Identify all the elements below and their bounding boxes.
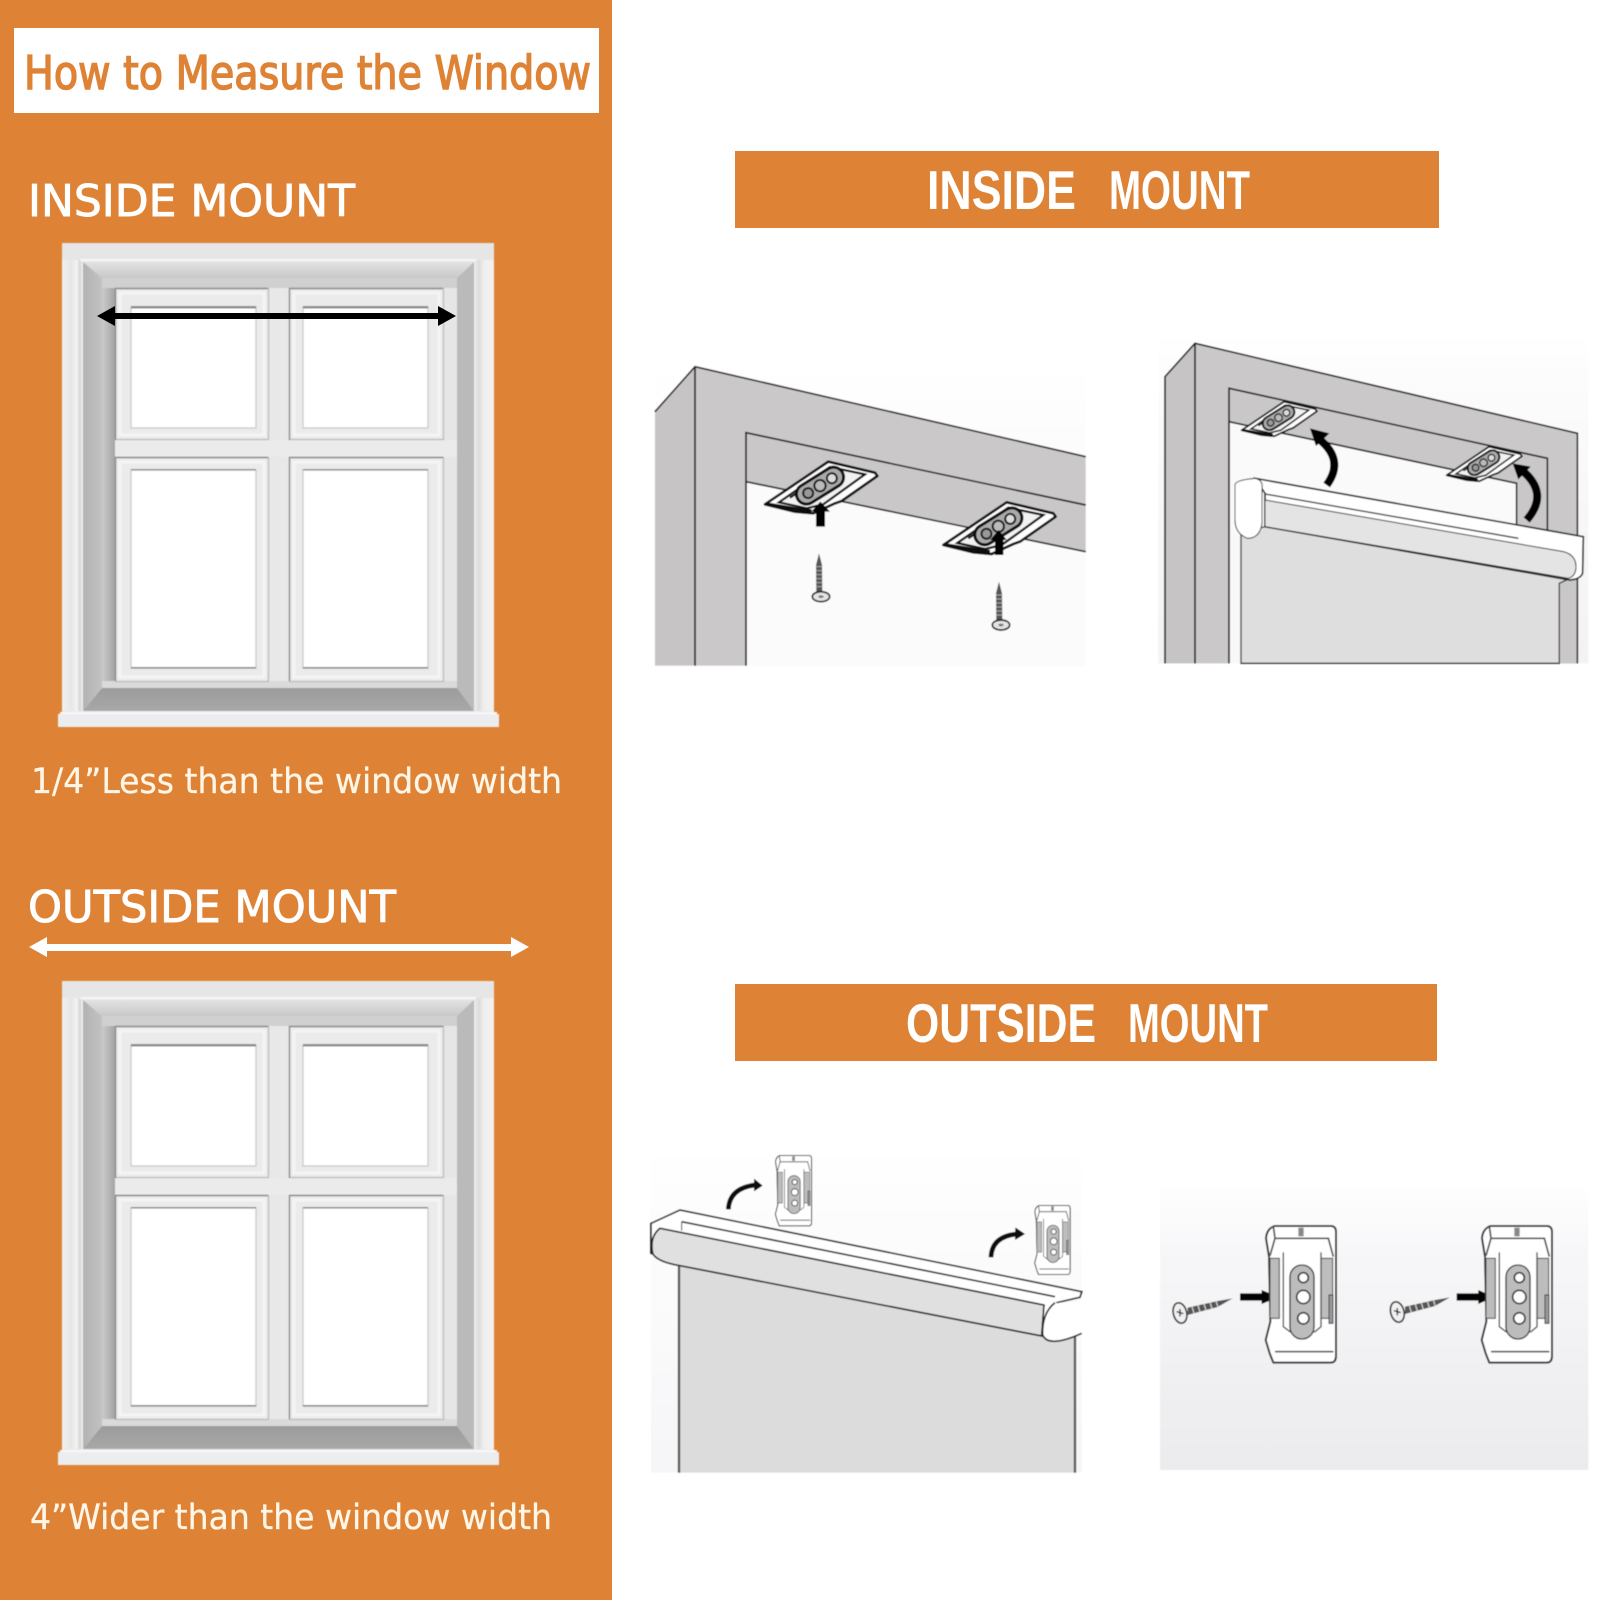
arrow curved left — [728, 1179, 763, 1209]
bracket left — [765, 462, 877, 513]
text: inside measurement: 1/4”Less than the window width — [31, 762, 562, 802]
panel: inside mount step 2 — [1158, 327, 1588, 663]
text: outside measurement: 4”Wider than the window width — [30, 1498, 552, 1538]
banner: inside mount: MOUNT — [1109, 159, 1250, 221]
panel: orange measure column — [0, 0, 612, 1600]
bracket left — [1266, 1226, 1336, 1363]
blind fabric — [1241, 527, 1570, 663]
arrow curved right — [1513, 463, 1537, 520]
bracket left — [1242, 402, 1317, 436]
screw right — [1388, 1297, 1450, 1324]
panel: inside mount step 1 — [655, 353, 1086, 666]
panel: outside mount step 2 — [1160, 1180, 1588, 1470]
arrow up right — [990, 530, 1007, 555]
bracket right — [1482, 1226, 1552, 1363]
bracket left — [775, 1156, 812, 1226]
arrow left — [1240, 1290, 1278, 1304]
arrow curved left — [1310, 428, 1334, 485]
banner: outside mount — [735, 984, 1437, 1061]
banner: outside mount: OUTSIDE — [906, 992, 1096, 1054]
headrail — [1235, 478, 1583, 580]
screw right — [992, 582, 1010, 630]
window: outside mount — [58, 981, 499, 1465]
bracket right — [1035, 1206, 1070, 1275]
arrow: inside width — [97, 306, 456, 326]
arrow up left — [811, 502, 830, 527]
arrow curved right — [991, 1227, 1025, 1257]
heading: outside mount: OUTSIDE MOUNT — [28, 882, 396, 933]
banner: inside mount: INSIDE — [927, 159, 1076, 221]
bracket right — [1447, 447, 1522, 481]
screw left — [812, 553, 830, 602]
banner: inside mount — [735, 151, 1439, 228]
title: How to Measure the Window — [24, 46, 591, 100]
window: inside mount — [58, 243, 499, 727]
arrow: outside width — [29, 937, 529, 957]
bracket right — [943, 502, 1056, 554]
blind fabric — [679, 1262, 1075, 1473]
heading: inside mount: INSIDE MOUNT — [28, 176, 355, 227]
headrail — [651, 1210, 1082, 1341]
arrow right — [1457, 1290, 1494, 1304]
title — [14, 28, 599, 113]
screw left — [1171, 1298, 1233, 1325]
panel: outside mount step 1 — [651, 1133, 1082, 1473]
banner: outside mount: MOUNT — [1128, 992, 1268, 1054]
